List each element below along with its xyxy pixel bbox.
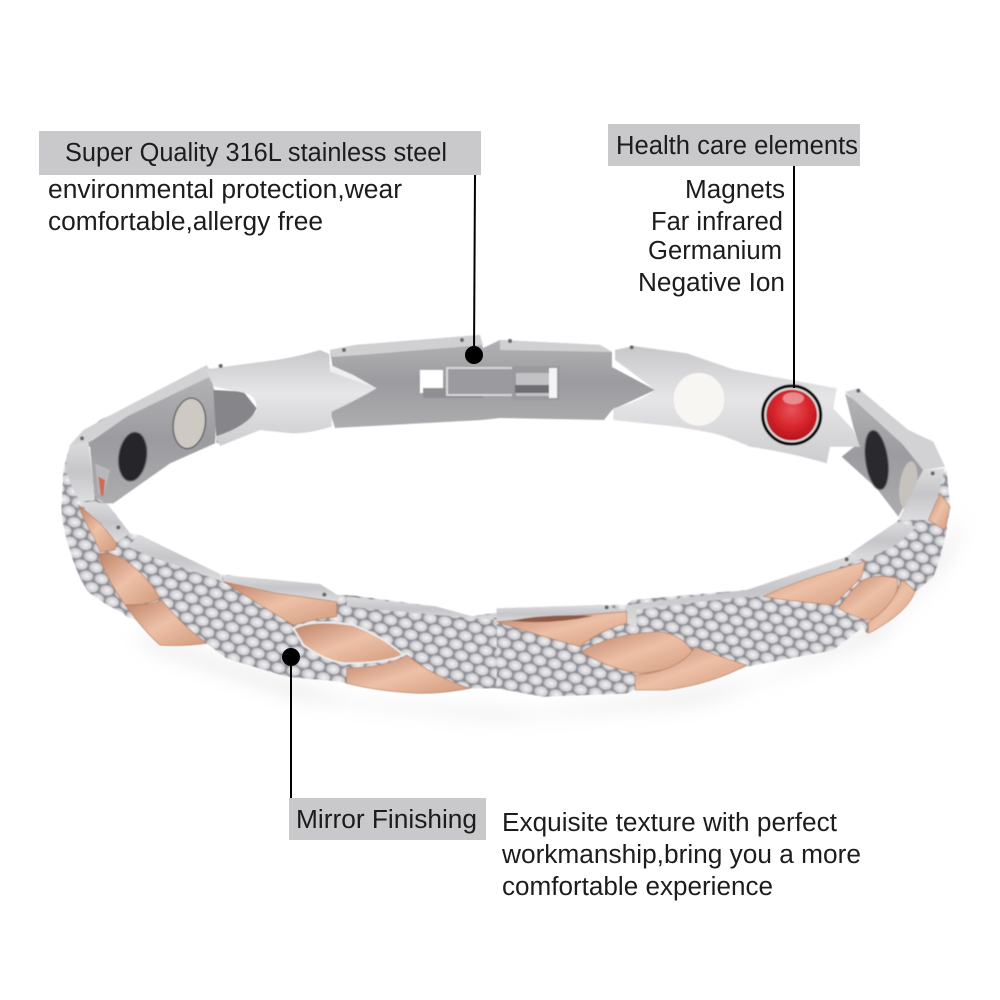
front band left half: scale texture <box>62 443 513 693</box>
text block: texture description <box>501 809 861 901</box>
text block: elements list: Magnets <box>685 176 785 204</box>
text block: texture description: Exquisite texture with perfect <box>502 809 837 837</box>
polished silver ledges, right half <box>497 345 945 627</box>
text block: texture description: comfortable experience <box>502 873 773 901</box>
text block: steel description: comfortable,allergy free <box>48 208 323 236</box>
right back link: grey panel with magnets <box>842 388 945 517</box>
right X-shaped silver link <box>613 346 860 463</box>
text block: steel description <box>48 176 403 236</box>
clasp: grey centre links <box>330 335 655 428</box>
left X-shaped silver link <box>205 350 377 446</box>
bracelet illustration <box>62 335 950 697</box>
heading: Super Quality 316L stainless steel <box>39 131 481 175</box>
heading: Health care elements: Health care elements <box>616 132 858 160</box>
text block: texture description: workmanship,bring you a more <box>501 841 861 869</box>
heading: Super Quality 316L stainless steel: Super Quality 316L stainless steel <box>65 139 447 167</box>
bracelet soft shadow <box>130 510 965 720</box>
leader line: health care elements <box>793 166 795 388</box>
text block: elements list: Far infrared <box>651 208 783 236</box>
red stone with black ring <box>763 386 821 444</box>
front band right half: scale texture <box>497 470 950 697</box>
text block: steel description: environmental protection,wear <box>48 176 403 204</box>
rose gold panels, left half <box>78 505 513 693</box>
heading: Mirror Finishing: Mirror Finishing <box>296 806 477 834</box>
heading: Mirror Finishing <box>289 798 486 840</box>
polished silver ledges, left half <box>65 364 513 622</box>
left back link: grey inner panel with magnets <box>70 365 257 503</box>
heading: Health care elements <box>608 124 860 166</box>
leader line: mirror finishing <box>282 648 300 798</box>
leader line: stainless steel <box>465 175 483 364</box>
text block: elements list: Negative Ion <box>638 269 785 297</box>
text block: elements list: Germanium <box>648 237 782 265</box>
text block: elements list <box>638 176 785 297</box>
rose gold panels, right half <box>497 493 950 690</box>
white stone <box>673 373 725 426</box>
